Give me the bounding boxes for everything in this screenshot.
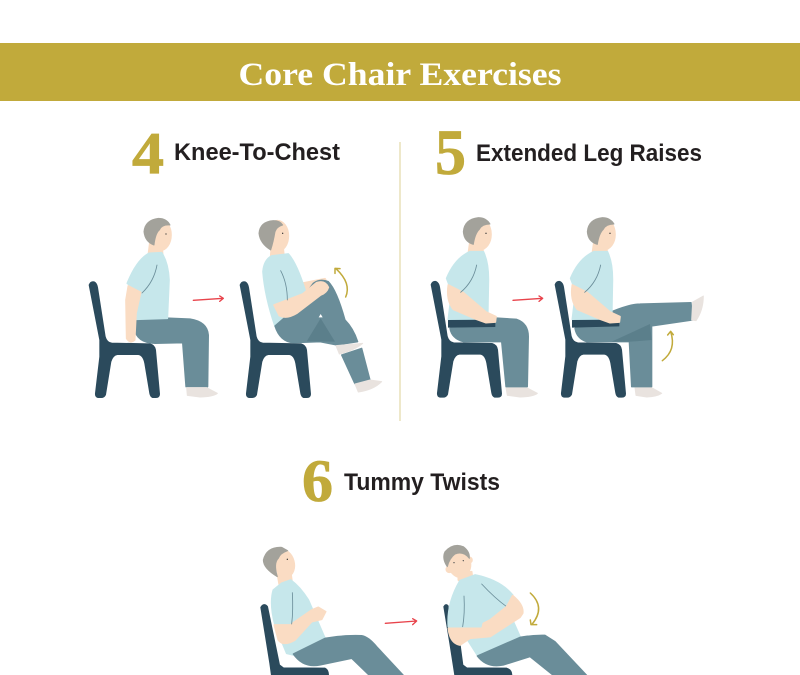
figure: seated start pose: [89, 218, 217, 397]
heading: Tummy Twists: Tummy Twists: [344, 469, 500, 496]
arrow: gold leg lift: [662, 331, 673, 361]
figure: leaning back pose: [261, 547, 403, 675]
title banner: [0, 43, 800, 101]
arrow: red transition: [193, 296, 223, 301]
title: Core Chair Exercises: [238, 57, 562, 93]
panel: exercise 6 tummy twists: [261, 448, 587, 675]
heading: Extended Leg Raises: Extended Leg Raises: [476, 140, 702, 167]
arrow: red transition: [385, 619, 417, 625]
figure: leg extended pose: [555, 218, 703, 397]
panel: exercise 4 knee-to-chest: [89, 120, 382, 397]
panel: exercise 5 extended leg raises: [431, 117, 703, 397]
figure: seated start pose: [431, 218, 537, 397]
illustration: leg raise start and end poses: [431, 218, 703, 397]
illustration: knee-to-chest start and end poses: [89, 218, 382, 397]
figure: knee raised pose: [240, 221, 382, 397]
number 4: 4: [132, 120, 164, 186]
arrow: gold twist: [530, 593, 539, 625]
illustration: tummy twist start and end poses: [261, 545, 587, 675]
figure: twisted pose: [444, 545, 587, 675]
number 5: 5: [435, 117, 466, 189]
arrow: gold knee lift: [335, 268, 347, 297]
number 6: 6: [302, 448, 333, 514]
heading: Knee-To-Chest: Knee-To-Chest: [174, 139, 340, 166]
arrow: red transition: [513, 296, 543, 301]
